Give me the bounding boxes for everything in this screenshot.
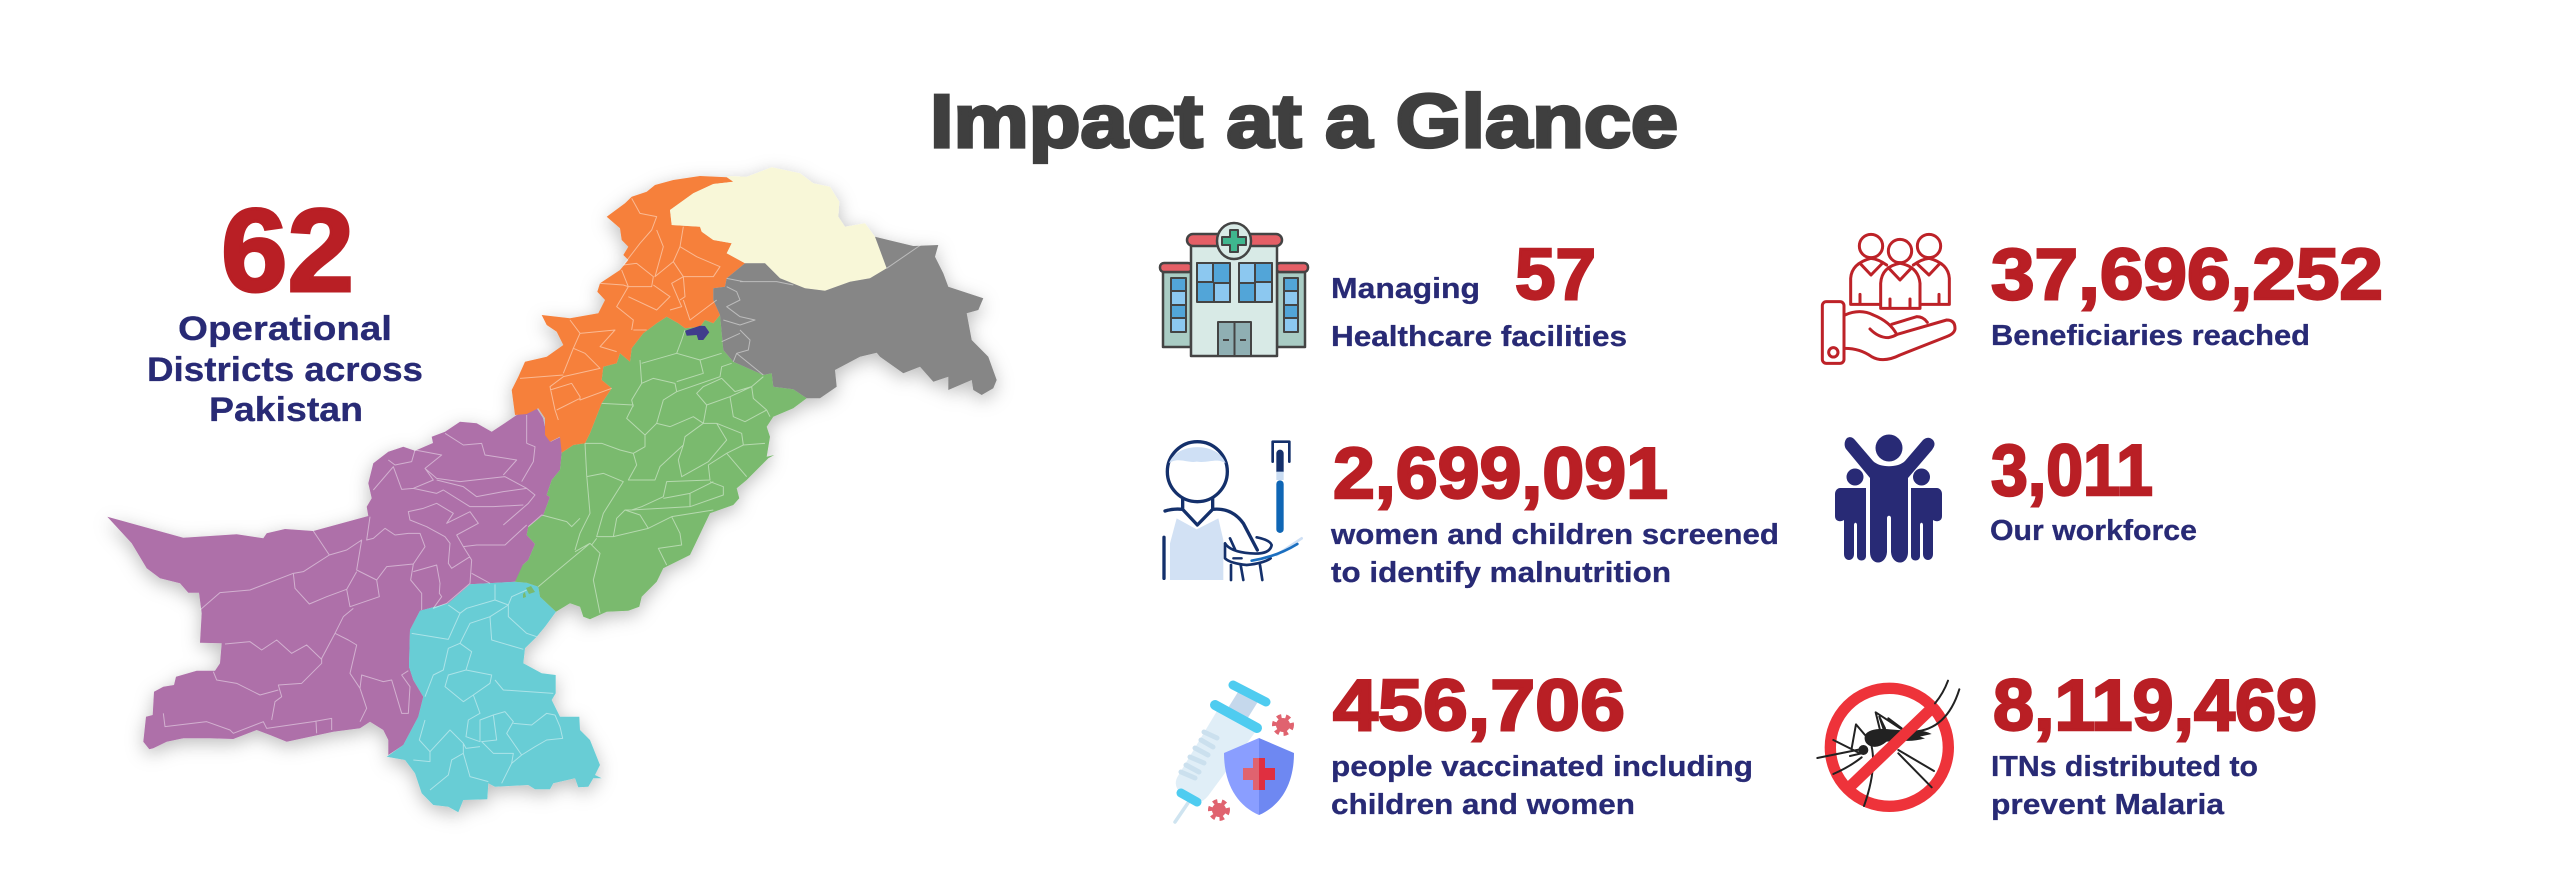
stat: beneficiaries reached: 37,696,252 <box>1991 235 2383 315</box>
region: Balochistan <box>107 408 562 755</box>
region: Azad Kashmir <box>713 237 997 398</box>
stat: people vaccinated: people vaccinated including <box>1331 751 1753 783</box>
Sindh district lines <box>412 584 563 790</box>
region: Khyber Pakhtunkhwa <box>512 176 745 453</box>
stat: ITNs distributed: 8,119,469 <box>1993 666 2317 746</box>
stat: ITNs distributed: prevent Malaria <box>1991 789 2225 821</box>
stat: 62 operational districts: 62 <box>221 185 354 317</box>
Balochistan district lines <box>163 415 535 733</box>
stat: workforce: Our workforce <box>1990 515 2197 547</box>
stat: women and children screened <box>1330 434 1779 589</box>
northern district lines <box>520 198 921 613</box>
region: Sindh <box>387 582 602 812</box>
stat: 57 healthcare facilities: Healthcare facilities <box>1331 321 1627 353</box>
icon: workforce people <box>1835 434 1942 562</box>
stat: beneficiaries reached <box>1991 235 2383 352</box>
stat: women and children screened: to identify malnutrition <box>1331 557 1671 589</box>
stat: workforce: 3,011 <box>1991 431 2153 511</box>
stat: 57 healthcare facilities <box>1331 235 1627 353</box>
map of Pakistan <box>107 167 997 812</box>
stat: ITNs distributed <box>1991 666 2317 821</box>
region: Sindh islet <box>523 586 535 598</box>
stat: 57 healthcare facilities: Managing <box>1331 273 1480 305</box>
stat: 62 operational districts: Operational <box>178 310 392 348</box>
stat: people vaccinated: 456,706 <box>1333 666 1625 746</box>
stat: 62 operational districts: Districts across <box>147 351 423 389</box>
title: Impact at a Glance <box>930 79 1678 163</box>
icon: hospital <box>1160 223 1308 356</box>
stat: people vaccinated: children and women <box>1331 789 1635 821</box>
region: Gilgit-Baltistan <box>670 167 887 291</box>
stat: beneficiaries reached: Beneficiaries reached <box>1991 320 2310 352</box>
stat: 57 healthcare facilities: 57 <box>1515 235 1596 315</box>
icon: no mosquito <box>1817 681 1959 806</box>
stat: people vaccinated <box>1331 666 1753 821</box>
stat: 62 operational districts <box>147 185 423 429</box>
icon: hand holding people <box>1822 234 1955 363</box>
stat: women and children screened: women and children screened <box>1330 519 1779 551</box>
icon: syringe and shield <box>1175 685 1294 822</box>
region: Punjab <box>515 315 807 619</box>
region: Islamabad <box>685 326 709 340</box>
stat: workforce <box>1990 431 2197 547</box>
stat: women and children screened: 2,699,091 <box>1333 434 1668 514</box>
stat: ITNs distributed: ITNs distributed to <box>1991 751 2258 783</box>
icon: child being measured for malnutrition <box>1164 442 1302 580</box>
stat: 62 operational districts: Pakistan <box>209 391 363 429</box>
